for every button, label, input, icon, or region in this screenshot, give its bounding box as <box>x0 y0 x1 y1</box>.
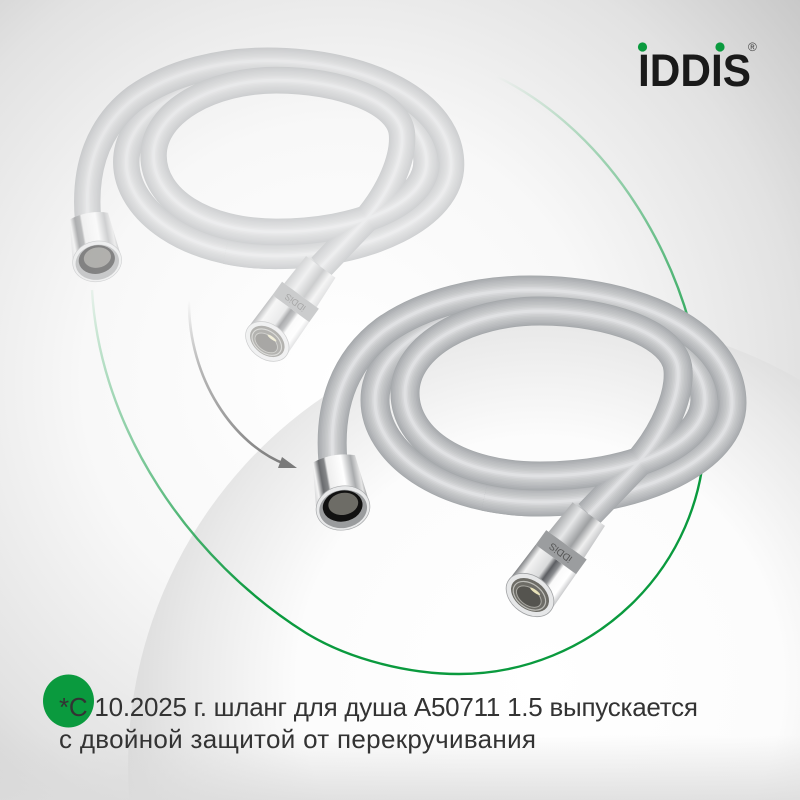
green curved line <box>92 71 705 674</box>
caption text: с двойной защитой от перекручивания <box>59 724 536 754</box>
caption text: *С 10.2025 г. шланг для душа А50711 1.5 выпускается <box>59 692 698 722</box>
logo: IDDIS: ® <box>748 40 757 54</box>
caption text <box>59 692 698 754</box>
hose: old version, light <box>64 61 451 370</box>
green dot accent <box>43 674 94 728</box>
logo: IDDIS: IDDIS <box>638 45 751 96</box>
arrow: from old hose to new hose <box>189 300 297 468</box>
hose: new version, silver: iDDiS <box>547 540 575 564</box>
hose: new version, silver <box>307 290 732 626</box>
large white disc <box>128 319 800 800</box>
hose: old version, light: iDDiS <box>283 291 307 313</box>
